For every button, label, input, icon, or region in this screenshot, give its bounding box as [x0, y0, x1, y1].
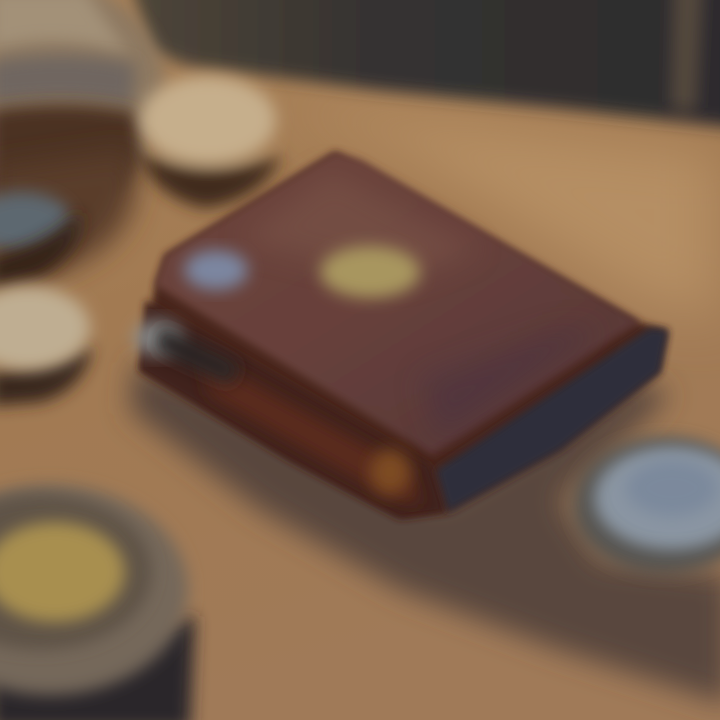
wallet body underlay [140, 152, 668, 518]
white card edge [134, 320, 182, 356]
gold coin [0, 522, 125, 622]
cover highlight [240, 170, 480, 280]
warm light patch on table [270, 100, 720, 320]
gold emblem [320, 246, 420, 298]
wallet spine side [436, 328, 668, 512]
stacked plates on left edge [0, 150, 136, 406]
wallet cast shadow [130, 360, 720, 705]
white saucer behind wallet [135, 76, 282, 208]
glass jar top left [0, 0, 165, 201]
dark slot under card [155, 325, 240, 385]
cover lower bluish shade [420, 330, 600, 440]
blue card corner [184, 250, 248, 290]
wallet front side [140, 300, 445, 518]
wallet top cover [155, 152, 640, 455]
wallet red-brown edge glow [200, 355, 420, 505]
amber clasp [370, 450, 410, 494]
leather wallet [134, 152, 668, 518]
blue-grey plate right [573, 437, 720, 573]
plate with gold coin bottom left [0, 485, 195, 720]
dark background wall [130, 0, 720, 128]
